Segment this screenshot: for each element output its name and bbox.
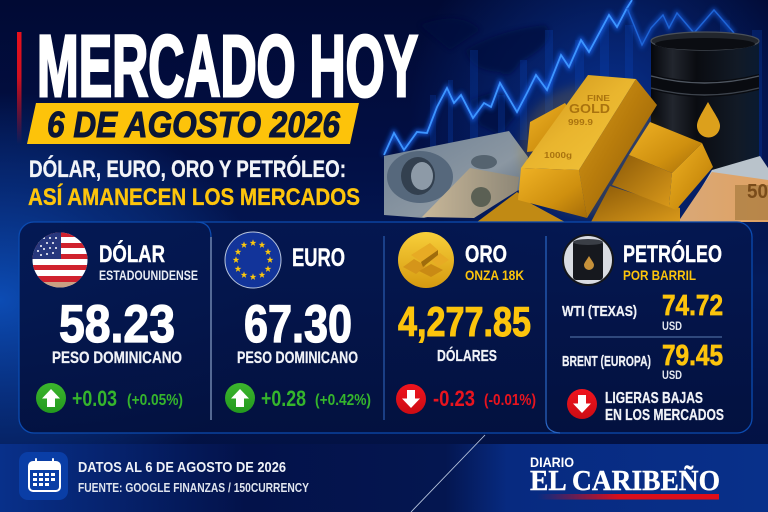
WTI label: WTI (TEXAS) (562, 303, 637, 320)
icon: up arrow (225, 383, 255, 413)
Brent label: BRENT (EUROPA) (562, 353, 651, 370)
gold bars: GOLD (569, 101, 610, 116)
icon: EU flag (225, 232, 281, 288)
heading: DÓLAR (99, 240, 165, 268)
icon: oil barrel (563, 235, 613, 285)
Brent value: 79.45 (662, 340, 723, 372)
heading: EURO (292, 244, 345, 272)
icon: up arrow (36, 383, 66, 413)
panels container (19, 222, 752, 433)
WTI unit: USD (662, 319, 682, 333)
logo: Diario El Caribeño: EL CARIBEÑO (530, 464, 720, 497)
logo: Diario El Caribeño (530, 454, 720, 500)
unit: PESO DOMINICANO (52, 348, 182, 367)
value: 58.23 (59, 295, 175, 354)
subtitle: DÓLAR, EURO, ORO Y PETRÓLEO: (29, 155, 346, 183)
change percent: (+0.42%) (315, 392, 371, 409)
oil barrel (651, 32, 759, 170)
accent bar (17, 32, 22, 144)
icon: down arrow (396, 384, 426, 414)
subtitle: ASÍ AMANECEN LOS MERCADOS (28, 183, 360, 211)
footer date text: DATOS AL 6 DE AGOSTO DE 2026 (78, 459, 286, 476)
heading: PETRÓLEO (623, 240, 722, 268)
unit: DÓLARES (437, 346, 497, 365)
gold bar engraving: FINE (587, 94, 611, 103)
panel: dólar (32, 222, 211, 420)
logo: Diario El Caribeño: DIARIO (530, 454, 574, 470)
WTI value: 74.72 (662, 290, 723, 322)
value: 4,277.85 (398, 298, 531, 345)
icon: calendar (19, 452, 68, 500)
gold bars: 999.9 (568, 118, 594, 127)
unit: PESO DOMINICANO (237, 348, 358, 367)
subtitle (28, 155, 360, 211)
chart line glow (384, 0, 632, 155)
subheading: ONZA 18K (465, 267, 524, 283)
market note: LIGERAS BAJAS (605, 390, 703, 407)
icon: gold coin (398, 232, 454, 288)
subheading: ESTADOUNIDENSE (99, 267, 198, 283)
subheading: POR BARRIL (623, 267, 696, 283)
market note: EN LOS MERCADOS (605, 407, 724, 424)
dollar bill back (384, 131, 528, 218)
icon: US flag (32, 232, 88, 288)
gold bars (477, 75, 713, 222)
change: +0.28 (261, 386, 306, 411)
panel: euro (225, 232, 371, 413)
candlestick bars backdrop (430, 20, 762, 159)
world map shapes (466, 24, 550, 134)
market note (605, 390, 724, 424)
euro notes (678, 156, 768, 222)
change: -0.23 (433, 386, 475, 411)
hero illustration: market chart, money, gold and oil (384, 0, 768, 222)
panel: oro (384, 232, 536, 420)
date banner: 6 DE AGOSTO 2026 (47, 104, 341, 145)
footer source text: FUENTE: GOOGLE FINANZAS / 150CURRENCY (78, 481, 310, 495)
change percent: (-0.01%) (484, 392, 536, 409)
icon: down arrow (567, 389, 597, 419)
change: +0.03 (72, 386, 117, 411)
diagonal divider (411, 435, 485, 512)
value: 67.30 (244, 295, 352, 354)
Brent unit: USD (662, 368, 682, 382)
chart line (384, 0, 632, 155)
gold glow (520, 85, 660, 215)
dollar portrait (387, 151, 497, 203)
dollar bill front (422, 168, 519, 218)
heading: ORO (465, 241, 507, 268)
change percent: (+0.05%) (127, 392, 183, 409)
footer band (0, 444, 768, 512)
panel: petróleo (546, 235, 724, 433)
title: MERCADO HOY (37, 18, 418, 115)
gold bars: 1000g (544, 151, 572, 160)
